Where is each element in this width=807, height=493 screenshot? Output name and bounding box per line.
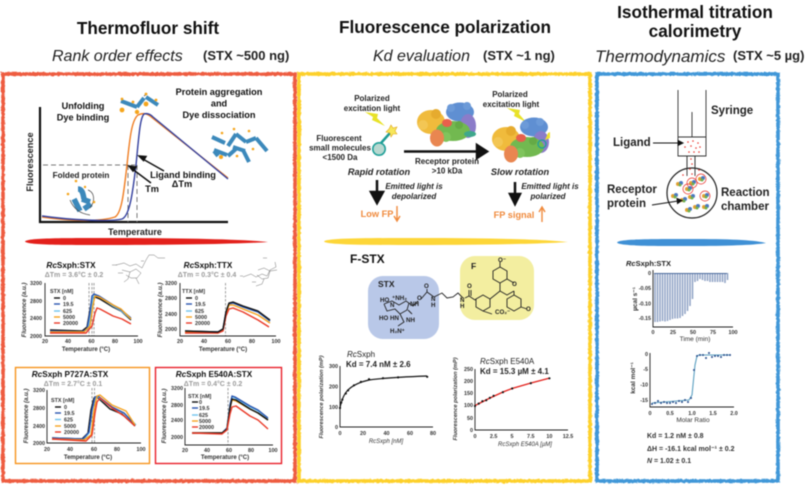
label: depolarized: Emitted light is	[385, 182, 443, 191]
molecule: TTX sketch	[240, 258, 277, 286]
legend	[51, 398, 79, 436]
tick labels: 40	[65, 339, 71, 345]
tick labels: 25	[670, 330, 676, 336]
tick labels: 150	[464, 391, 473, 397]
label: ligand: Ligand	[613, 137, 651, 149]
panel: thermofluor shift	[3, 18, 295, 481]
curves	[52, 395, 136, 441]
tick labels: 2400	[33, 424, 45, 430]
tick labels: 40	[201, 339, 207, 345]
tick labels: 2.5	[490, 434, 497, 440]
y axis label: Fluorescence polarization (mP)	[453, 357, 459, 440]
chart: RcSxph E540A FP binding	[453, 357, 573, 448]
atom labels: H	[431, 302, 436, 309]
data points	[651, 352, 731, 405]
sample amount: STX 5 ug: (STX ~5 µg)	[733, 48, 804, 63]
tick labels: 100	[728, 330, 738, 336]
delta Tm: ΔTm = 0.3°C ± 0.4	[178, 271, 236, 279]
tick labels: 0	[474, 434, 476, 440]
tick labels: 20	[44, 447, 50, 453]
chart title: RcSxph:STX	[46, 261, 96, 270]
tick labels: 2800	[33, 406, 45, 412]
chart box: E540A	[156, 368, 282, 464]
chart: RcSxph TTX melt curves	[158, 258, 280, 353]
subheading: thermodynamics: Thermodynamics	[595, 47, 726, 66]
atom labels: H	[460, 303, 465, 310]
tick labels: -0.15	[639, 316, 651, 322]
thermodynamic values	[647, 433, 735, 465]
legend: STX [nM]	[50, 289, 74, 295]
axis labels: Temperature (°C)	[64, 455, 112, 461]
delta H: ΔH = -16.1 kcal mol⁻¹ ± 0.2	[647, 446, 735, 453]
Kd: Kd = 1.2 nM ± 0.8	[647, 433, 704, 440]
icon: fluorescent molecule	[373, 125, 397, 155]
tick labels: 1.0	[688, 411, 696, 417]
axes	[650, 353, 734, 407]
axis labels: Temperature (°C)	[199, 347, 247, 353]
y axis label: Fluorescence (a.u.)	[22, 283, 28, 337]
delta Tm: ΔTm = 2.7°C ± 0.1	[44, 380, 102, 388]
x axis label: RcSxph E540A [µM]	[498, 442, 552, 448]
molecule: STX sketch	[112, 255, 165, 284]
tick labels: 100	[464, 403, 473, 409]
tick labels: -0.05	[639, 286, 651, 292]
panel heading: ITC: Isothermal titration	[617, 2, 773, 22]
tick labels	[33, 388, 146, 453]
legend: 625	[64, 418, 73, 424]
y axis label: kcal mol⁻¹	[630, 362, 637, 394]
tick labels: 40	[384, 431, 390, 437]
tick labels: 75	[710, 330, 716, 336]
tick labels: 100	[329, 405, 338, 411]
tick labels: 20	[177, 339, 183, 345]
atom labels: ⁺NH₂	[392, 295, 407, 302]
arrow: FP up	[539, 207, 545, 222]
atom labels: O	[526, 306, 531, 313]
tick labels	[30, 281, 142, 345]
fit curve	[475, 378, 549, 406]
panel border: blue	[597, 74, 778, 481]
label: ligand binding: ΔTm	[172, 179, 192, 189]
curves	[192, 396, 268, 434]
tick labels: -15	[640, 398, 648, 404]
y axis label: Fluorescence polarization (mP)	[319, 355, 325, 438]
legend: STX [nM]	[51, 398, 75, 404]
label: excitation light left: excitation light	[344, 104, 401, 113]
axis labels: Temperature (°C)	[62, 347, 110, 353]
tick labels: 80	[112, 339, 118, 345]
tick labels	[640, 352, 738, 417]
tick labels: 2000	[33, 441, 45, 447]
chart: ITC binding isotherm	[630, 352, 738, 424]
label: folded protein: Folded protein	[53, 171, 109, 180]
label: STX region: STX	[378, 279, 395, 289]
label: slow rotation: Slow rotation	[491, 167, 549, 177]
curve: orange	[42, 114, 228, 220]
heading: F-STX: F-STX	[350, 252, 385, 266]
label: depolarized: depolarized	[392, 192, 437, 201]
legend: 625	[63, 309, 72, 315]
subheading: Kd evaluation: Kd evaluation	[373, 48, 470, 65]
y axis label: µcal s⁻¹	[632, 287, 639, 311]
legend: 5000	[195, 315, 207, 321]
tick labels: 10	[546, 434, 552, 440]
legend: STX [nM]	[188, 394, 212, 400]
tick labels	[329, 364, 436, 437]
curves	[185, 302, 270, 333]
icon: aggregated protein	[212, 128, 267, 162]
tick labels: 80	[249, 339, 255, 345]
tick labels: 3200	[171, 386, 183, 392]
label: receptor protein: Receptor	[607, 184, 657, 196]
structure: F-STX	[368, 256, 534, 339]
atom labels: N	[390, 302, 395, 309]
arrow: ligand binding	[139, 156, 164, 171]
axes	[185, 388, 273, 445]
tick labels: -0.10	[639, 302, 651, 308]
bonds	[384, 262, 527, 326]
legend	[50, 289, 78, 327]
panel: fluorescence polarization	[299, 17, 590, 481]
divider brush stroke: blue	[617, 239, 766, 246]
label: F region: F	[471, 261, 476, 271]
tick labels: 60	[225, 339, 231, 345]
atom labels: NH	[406, 317, 415, 324]
tick labels: 2400	[171, 418, 183, 424]
legend: 20000	[63, 321, 78, 327]
icon: lightning left	[365, 112, 385, 126]
tick labels: 50	[467, 416, 473, 422]
chart title: RcSxph	[347, 350, 375, 359]
tick labels: 2800	[30, 299, 42, 305]
chart title: RcSxph:TTX	[184, 261, 233, 270]
label: aggregation: Protein aggregation	[176, 87, 262, 97]
chart title: RcSxph E540A:STX	[176, 370, 253, 379]
label: unfolding: Dye binding	[57, 112, 109, 122]
tick labels: 200	[329, 384, 338, 390]
tick labels: 300	[329, 364, 338, 370]
chart: thermal unfolding schematic	[25, 87, 267, 237]
label: small molecules: <1500 Da	[323, 153, 358, 162]
tick labels: 0	[470, 428, 473, 434]
legend: 19.5	[64, 411, 74, 417]
sample amount: STX 1 ng: (STX ~1 ng)	[483, 48, 555, 63]
legend: TTX [nM]	[182, 289, 205, 295]
tick labels: 0	[652, 330, 654, 336]
injection spikes	[655, 273, 728, 322]
chart title: RcSxph:STX	[626, 259, 671, 268]
axis labels: Temperature (°C)	[201, 455, 249, 461]
tick labels: 100	[134, 339, 142, 345]
legend: 19.5	[195, 302, 206, 308]
arrow: FP down	[394, 206, 400, 221]
baseline	[654, 272, 727, 274]
label: receptor protein: protein	[607, 198, 646, 210]
label: rapid rotation: Rapid rotation	[348, 167, 411, 177]
data points	[474, 377, 551, 407]
x axis label: Time (min)	[680, 336, 710, 343]
tick labels: 60	[88, 339, 94, 345]
arrow: emitted right	[510, 182, 520, 204]
legend: 0	[199, 400, 202, 406]
axes	[180, 283, 276, 336]
panel border: yellow	[299, 74, 590, 481]
legend: 0	[63, 296, 66, 302]
atom labels: H₂N⁺	[390, 328, 405, 335]
tick labels: 20	[182, 448, 188, 454]
label: receptor protein: Receptor protein	[415, 157, 479, 166]
y axis label: Fluorescence (a.u.)	[162, 389, 168, 443]
region: fluorescein	[460, 256, 534, 320]
arrow: binding	[404, 145, 487, 158]
diagram: ITC instrument	[607, 90, 770, 218]
label: unfolding: Unfolding	[62, 101, 104, 111]
arrow: ligand	[653, 140, 683, 146]
legend: 20000	[64, 430, 79, 436]
threshold guide lines	[43, 165, 137, 222]
tick labels: 0	[645, 352, 648, 358]
legend	[182, 289, 210, 327]
panel: isothermal titration calorimetry	[595, 2, 804, 481]
tick labels: 2800	[171, 403, 183, 409]
tick labels: 7.5	[527, 434, 535, 440]
tick labels: 80	[114, 447, 120, 453]
Kd value: Kd = 15.3 µM ± 4.1	[480, 367, 549, 376]
syringe	[678, 90, 706, 176]
label: x axis: Temperature	[108, 227, 162, 237]
label: small molecules: small molecules	[309, 144, 371, 152]
tick labels	[639, 271, 738, 336]
divider brush stroke: yellow	[324, 238, 568, 245]
label: polarized: Emitted light is	[521, 182, 579, 191]
y axis label: Fluorescence (a.u.)	[158, 283, 164, 337]
axes	[340, 366, 433, 427]
label: excitation light right: Polarized	[492, 90, 528, 99]
panel heading: thermofluor: Thermofluor shift	[77, 18, 219, 38]
chart title: RcSxph P727A:STX	[32, 370, 109, 379]
tick labels: 20	[360, 431, 366, 437]
Kd value: Kd = 7.4 nM ± 2.6	[346, 360, 411, 369]
chart title: RcSxph E540A	[480, 357, 535, 366]
divider brush stroke: red	[25, 238, 268, 245]
curve: blue	[42, 114, 228, 220]
chart: RcSxph STX melt curves	[22, 255, 165, 353]
atom labels: CO₂⁻	[495, 309, 510, 316]
tick labels: 100	[268, 448, 278, 454]
tick labels: 0	[648, 271, 651, 277]
label: excitation light left: Polarized	[354, 94, 390, 103]
tick labels: 3200	[165, 281, 177, 287]
tick labels: 50	[690, 330, 696, 336]
legend: 19.5	[63, 302, 74, 308]
legend	[188, 394, 214, 431]
tick labels: 40	[204, 448, 210, 454]
atom labels: O	[424, 283, 429, 290]
legend: 20000	[199, 425, 214, 431]
tick labels: 5	[510, 434, 514, 440]
tick labels: 20	[42, 339, 48, 345]
tick labels: 100	[272, 339, 280, 345]
tick labels: 80	[430, 431, 436, 437]
legend: 0	[195, 296, 198, 302]
legend: 0	[64, 405, 67, 411]
axes	[45, 283, 138, 336]
ligand droplets	[682, 140, 701, 176]
delta Tm: ΔTm = 0.4°C ± 0.2	[184, 380, 242, 388]
label: FP signal: FP signal	[494, 210, 534, 220]
atom labels: O	[467, 283, 472, 290]
label: receptor protein: >10 kDa	[432, 166, 463, 176]
label: low FP: Low FP	[361, 209, 393, 219]
tick labels: 1.5	[709, 411, 717, 417]
tick labels: 2400	[165, 312, 177, 318]
data points	[339, 376, 428, 409]
tick labels: 60	[226, 448, 232, 454]
tick labels: 80	[248, 448, 254, 454]
sample amount: STX 500 ng: (STX ~500 ng)	[203, 48, 289, 63]
label: polarized: polarized	[529, 192, 567, 201]
legend: 625	[199, 413, 208, 419]
label: ligand binding: Ligand binding	[150, 170, 216, 180]
tick labels: 3200	[30, 281, 42, 287]
tick labels: 0	[338, 431, 342, 437]
tick labels: 200	[464, 379, 473, 385]
receptor proteins	[671, 174, 710, 212]
label: reaction chamber: chamber	[721, 201, 769, 213]
fit curve	[652, 355, 730, 403]
chamber	[667, 168, 717, 218]
axes	[653, 270, 733, 327]
arrow: Tm	[129, 166, 151, 183]
tick labels: 2.0	[730, 411, 738, 417]
tick labels: 2400	[30, 316, 42, 322]
atom labels: N	[460, 297, 465, 304]
chart: RcSxph FP binding	[319, 350, 436, 445]
tick labels: 2000	[171, 435, 183, 441]
atom labels	[379, 257, 531, 335]
tick labels: 2000	[30, 334, 42, 340]
axes	[475, 369, 568, 430]
legend: 20000	[195, 321, 210, 327]
panel heading: fluorescence polarization: Fluorescence polarization	[339, 17, 551, 37]
legend: 19.5	[199, 406, 210, 412]
tick labels: 12.5	[563, 434, 573, 440]
tick labels: 250	[464, 367, 473, 373]
tick labels: 60	[407, 431, 413, 437]
curves	[50, 294, 131, 333]
box outline	[16, 368, 150, 464]
y axis label: Fluorescence (a.u.)	[24, 389, 30, 443]
tick labels	[171, 386, 278, 454]
legend: 5000	[63, 315, 75, 321]
tick labels: 60	[91, 447, 97, 453]
atom labels: HO	[379, 315, 388, 322]
arrow: receptor	[652, 198, 682, 205]
tick labels	[464, 367, 573, 440]
tick labels: -10	[640, 382, 648, 388]
box outline	[156, 368, 282, 464]
axes	[47, 390, 141, 443]
icon: folded protein	[67, 180, 95, 215]
panel border: red	[3, 74, 295, 481]
chart: ITC thermogram	[626, 259, 738, 343]
tick labels: 0	[335, 425, 338, 431]
label: reaction chamber: Reaction	[721, 187, 770, 199]
legend: 5000	[199, 419, 211, 425]
atom labels: NH	[410, 301, 419, 308]
icon: receptor protein free	[417, 102, 476, 146]
label: aggregation: Dye dissociation	[182, 110, 256, 120]
legend: 625	[195, 309, 204, 315]
delta Tm: ΔTm = 3.6°C ± 0.2	[45, 271, 103, 279]
arrow: emitted left	[371, 180, 383, 203]
label: y axis: Fluorescence	[25, 132, 35, 192]
subheading: rank order effects: Rank order effects	[52, 48, 183, 65]
icon: receptor protein bound	[492, 118, 550, 162]
label: aggregation: and	[211, 98, 227, 108]
icon: unfolded protein with dye	[120, 93, 158, 114]
atom labels: N	[431, 296, 436, 303]
tick labels: -5	[643, 367, 648, 373]
N: N = 1.02 ± 0.1	[647, 458, 691, 465]
legend: 5000	[64, 424, 76, 430]
x axis label: Molar Ratio	[676, 417, 710, 424]
tick labels: 3200	[33, 388, 45, 394]
panel heading: ITC: calorimetry	[649, 21, 742, 41]
atom labels: HO	[380, 297, 389, 304]
tick labels: 2000	[165, 327, 177, 333]
atom labels: O	[417, 295, 422, 302]
label: small molecules: Fluorescent	[316, 134, 362, 143]
label: excitation light right: excitation light	[483, 100, 540, 109]
icon: lightning right	[507, 108, 526, 122]
tick labels: 2800	[165, 296, 177, 302]
atom labels: O⁻	[498, 257, 506, 264]
atom labels: HN	[390, 315, 399, 322]
tick labels: 100	[136, 447, 146, 453]
chart box: P727A	[16, 368, 150, 464]
atom labels: O	[512, 281, 517, 288]
label: syringe: Syringe	[711, 105, 753, 117]
x axis label: RcSxph [nM]	[369, 439, 403, 445]
fit curve	[340, 376, 427, 408]
tick labels: 40	[67, 447, 73, 453]
tick labels: 0	[648, 411, 652, 417]
tick labels	[165, 281, 280, 345]
label: Tm: Tm	[145, 184, 159, 194]
region: STX	[368, 276, 439, 339]
tick labels: 0.5	[666, 411, 674, 417]
axes	[40, 107, 228, 222]
